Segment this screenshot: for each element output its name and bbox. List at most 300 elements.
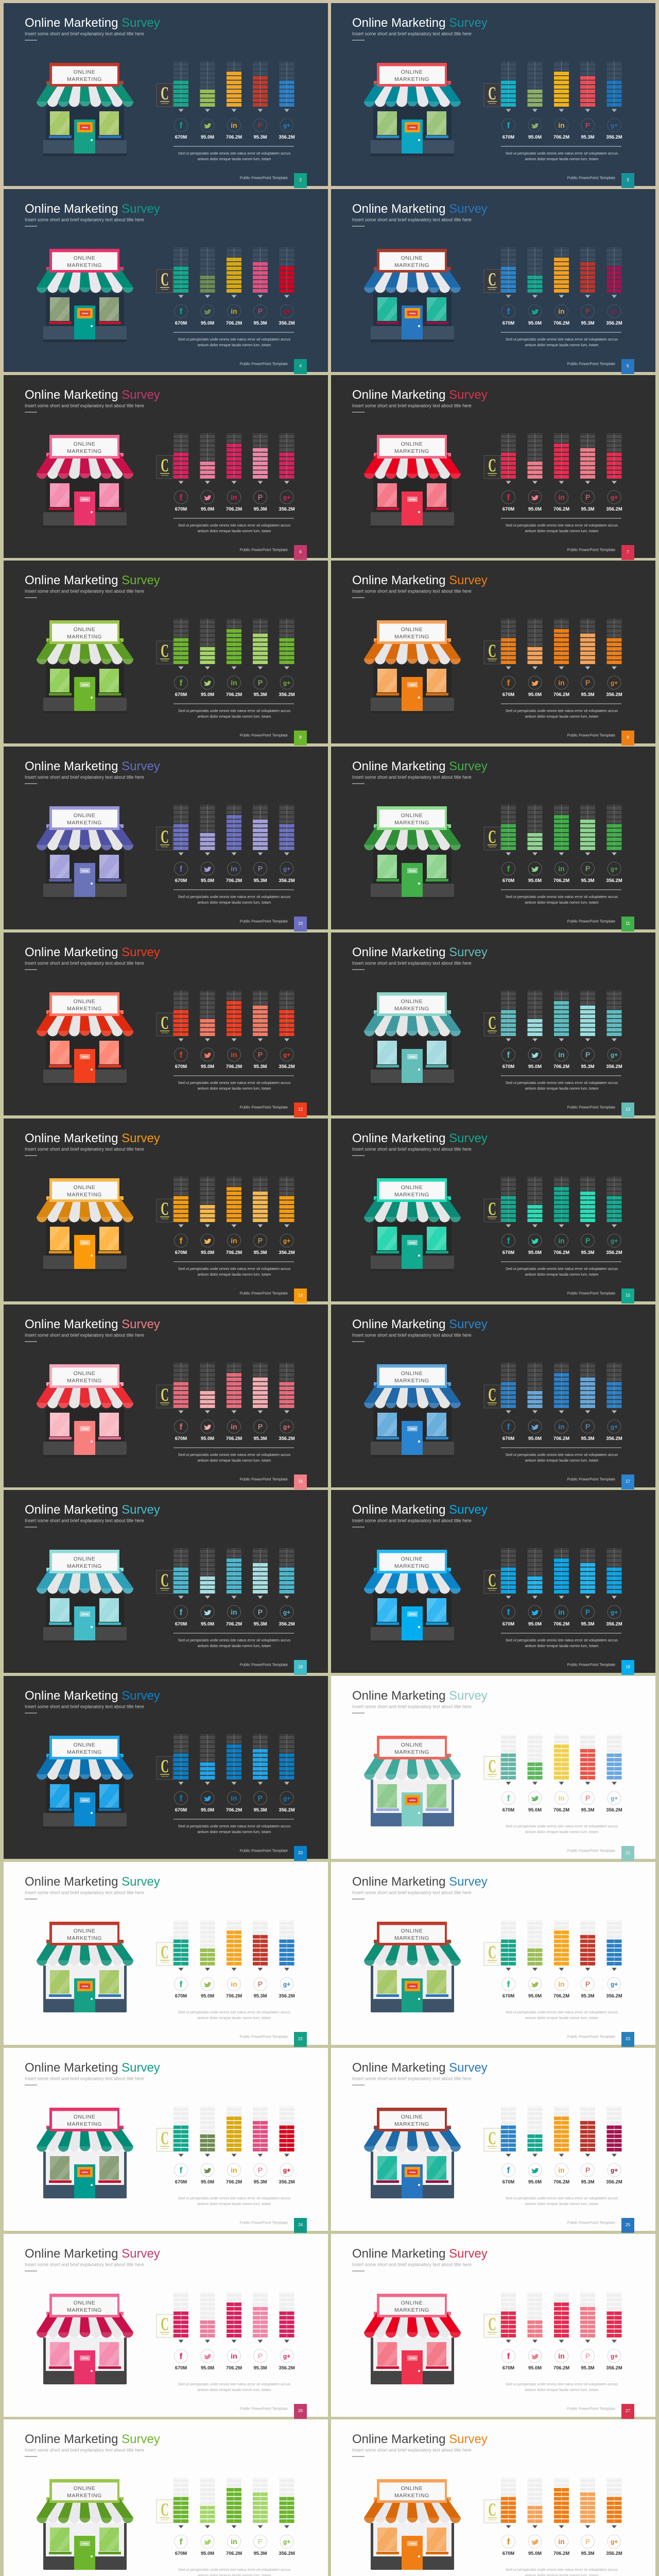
footer: Public PowerPoint Template <box>240 2406 288 2411</box>
page number: 24 <box>298 2223 303 2227</box>
description: Sed ut perspiciatis unde omnis iste natus error sit voluptatem accus <box>506 337 618 342</box>
bar chart: 95.3M <box>581 2365 595 2370</box>
bar chart: 95.3M <box>253 1063 267 1069</box>
title: Online Marketing Survey <box>352 1317 488 1331</box>
subtitle: Insert some short and brief explanatory text about title here <box>25 775 144 780</box>
subtitle: Insert some short and brief explanatory text about title here <box>352 1332 472 1337</box>
panel: slide 2 teal navy <box>4 3 328 188</box>
storefront <box>364 1178 461 1272</box>
page number: 18 <box>298 1665 303 1669</box>
description: Sed ut perspiciatis unde omnis iste natus error sit voluptatem accus <box>178 2382 290 2386</box>
page number: 19 <box>626 1665 630 1669</box>
subtitle: Insert some short and brief explanatory text about title here <box>352 588 472 594</box>
description: Sed ut perspiciatis unde omnis iste natus error sit voluptatem accus <box>178 894 290 899</box>
page number <box>621 731 634 745</box>
storefront: MARKETING <box>394 1192 429 1198</box>
description: Sed ut perspiciatis unde omnis iste natus error sit voluptatem accus <box>506 1824 618 1828</box>
description: antium dolor emque lauda nomm lum, totam <box>198 343 271 347</box>
bar chart: 670M <box>502 2550 514 2556</box>
bar chart <box>157 2292 295 2377</box>
bar chart <box>484 2106 622 2191</box>
storefront: ONLINE <box>401 255 423 261</box>
description: Sed ut perspiciatis unde omnis iste natus error sit voluptatem accus <box>506 2010 618 2014</box>
footer: Public PowerPoint Template <box>567 1662 615 1667</box>
bar chart: 95.3M <box>253 1621 267 1626</box>
bar chart: 356.2M <box>279 2179 295 2184</box>
page number: 25 <box>626 2223 630 2227</box>
bar chart: 95.0M <box>201 2550 214 2556</box>
bar chart: 95.0M <box>201 691 214 697</box>
storefront: MARKETING <box>67 76 102 82</box>
bar chart <box>484 619 622 704</box>
bar chart: 670M <box>175 2365 187 2370</box>
storefront: MARKETING <box>394 820 429 826</box>
storefront <box>37 2294 133 2387</box>
footer: Public PowerPoint Template <box>567 362 615 366</box>
bar chart: 95.0M <box>528 506 542 512</box>
bar chart: 95.3M <box>253 2365 267 2370</box>
page number: 21 <box>626 1851 630 1855</box>
description <box>178 151 290 161</box>
bar chart: 670M <box>502 1063 514 1069</box>
bar chart: 356.2M <box>279 1621 295 1626</box>
page number: 8 <box>299 735 302 740</box>
bar chart: 670M <box>175 1621 187 1626</box>
bar chart <box>484 2478 622 2563</box>
bar chart: 95.3M <box>253 1993 267 1998</box>
footer: Public PowerPoint Template <box>240 1849 288 1853</box>
storefront: MARKETING <box>67 1749 102 1755</box>
title: Online Marketing Survey <box>352 573 488 587</box>
bar chart <box>157 1548 295 1633</box>
bar chart: 95.3M <box>581 2179 595 2184</box>
footer: Public PowerPoint Template <box>240 2034 288 2039</box>
footer: Public PowerPoint Template <box>240 1662 288 1667</box>
title: Online Marketing Survey <box>25 1689 160 1703</box>
page number: 17 <box>626 1479 630 1484</box>
bar chart: 706.2M <box>226 1807 242 1812</box>
bar chart: 670M <box>175 691 187 697</box>
panel: slide 4 green navy <box>4 189 328 374</box>
storefront: ONLINE <box>74 1184 95 1191</box>
bar chart: 95.3M <box>253 2179 267 2184</box>
title: Online Marketing Survey <box>25 1503 160 1517</box>
description <box>506 1452 618 1463</box>
description: antium dolor emque lauda nomm lum, totam <box>198 1086 271 1091</box>
description <box>506 337 618 347</box>
storefront: MARKETING <box>67 820 102 826</box>
title: Online Marketing Survey <box>25 759 160 773</box>
bar chart: 356.2M <box>606 691 622 697</box>
description <box>178 523 290 533</box>
bar chart: 95.3M <box>581 2550 595 2556</box>
bar chart: 706.2M <box>226 2179 242 2184</box>
page number <box>621 173 634 188</box>
description: antium dolor emque lauda nomm lum, totam <box>525 1829 598 1834</box>
bar chart <box>484 1363 622 1448</box>
storefront: ONLINE <box>74 2300 95 2306</box>
page number <box>294 2404 307 2419</box>
storefront <box>37 1178 133 1272</box>
bar chart: 95.0M <box>528 1807 542 1812</box>
subtitle: Insert some short and brief explanatory text about title here <box>25 217 144 223</box>
footer: Public PowerPoint Template <box>567 733 615 738</box>
page number: 7 <box>627 550 629 554</box>
footer: Public PowerPoint Template <box>567 2034 615 2039</box>
description <box>178 1452 290 1463</box>
subtitle: Insert some short and brief explanatory text about title here <box>25 1518 144 1523</box>
storefront: MARKETING <box>67 448 102 454</box>
panel: slide 11 green dark <box>331 747 655 931</box>
description: Sed ut perspiciatis unde omnis iste natus error sit voluptatem accus <box>178 1452 290 1457</box>
bar chart <box>157 61 295 146</box>
footer: Public PowerPoint Template <box>567 2406 615 2411</box>
storefront <box>364 2108 461 2201</box>
title: Online Marketing Survey <box>352 1875 488 1889</box>
bar chart: 95.3M <box>581 1993 595 1998</box>
bar chart: 95.3M <box>581 134 595 140</box>
panel: slide 25 light blue <box>331 2048 655 2233</box>
storefront: ONLINE <box>401 626 423 633</box>
page number <box>294 359 307 374</box>
description: antium dolor emque lauda nomm lum, totam <box>198 2201 271 2206</box>
footer: Public PowerPoint Template <box>567 2221 615 2225</box>
bar chart: 706.2M <box>226 1249 242 1255</box>
storefront <box>37 620 133 714</box>
description: antium dolor emque lauda nomm lum, totam <box>525 2201 598 2206</box>
description: antium dolor emque lauda nomm lum, totam <box>198 714 271 719</box>
panel: slide 15 turquoise dark <box>331 1118 655 1303</box>
title: Online Marketing Survey <box>352 2247 488 2261</box>
description: Sed ut perspiciatis unde omnis iste natus error sit voluptatem accus <box>178 1266 290 1271</box>
bar chart <box>157 1920 295 2005</box>
description: Sed ut perspiciatis unde omnis iste natus error sit voluptatem accus <box>506 1638 618 1642</box>
bar chart: 95.3M <box>581 691 595 697</box>
footer: Public PowerPoint Template <box>240 2221 288 2225</box>
subtitle: Insert some short and brief explanatory text about title here <box>25 1704 144 1709</box>
page number: 26 <box>298 2409 303 2413</box>
title: Online Marketing Survey <box>25 2432 160 2446</box>
description: antium dolor emque lauda nomm lum, totam <box>525 1272 598 1277</box>
subtitle: Insert some short and brief explanatory text about title here <box>352 1147 472 1152</box>
description <box>506 2010 618 2020</box>
description <box>506 523 618 533</box>
storefront: MARKETING <box>67 1192 102 1198</box>
storefront <box>37 63 133 156</box>
footer: Public PowerPoint Template <box>240 362 288 366</box>
storefront: ONLINE <box>401 2114 423 2120</box>
description: Sed ut perspiciatis unde omnis iste natus error sit voluptatem accus <box>506 2567 618 2572</box>
page number <box>621 545 634 560</box>
bar chart: 95.0M <box>528 2179 542 2184</box>
description: antium dolor emque lauda nomm lum, totam <box>525 1086 598 1091</box>
description <box>178 337 290 347</box>
bar chart: 356.2M <box>606 506 622 512</box>
bar chart: 670M <box>502 1621 514 1626</box>
page number: 27 <box>626 2409 630 2413</box>
storefront: ONLINE <box>74 1928 95 1934</box>
bar chart <box>484 247 622 332</box>
bar chart: 95.0M <box>528 877 542 883</box>
page number <box>621 359 634 374</box>
bar chart: 356.2M <box>279 1807 295 1812</box>
storefront: MARKETING <box>67 634 102 640</box>
bar chart: 95.0M <box>528 1249 542 1255</box>
page number: 16 <box>298 1479 303 1484</box>
page number: 20 <box>298 1851 303 1855</box>
description: Sed ut perspiciatis unde omnis iste natus error sit voluptatem accus <box>178 708 290 713</box>
description: antium dolor emque lauda nomm lum, totam <box>198 900 271 905</box>
page number <box>294 1289 307 1303</box>
bar chart: 706.2M <box>553 1249 569 1255</box>
description: antium dolor emque lauda nomm lum, totam <box>198 2387 271 2392</box>
storefront <box>37 249 133 342</box>
title: Online Marketing Survey <box>25 202 160 216</box>
bar chart: 95.0M <box>201 1249 214 1255</box>
page number: 15 <box>626 1293 630 1298</box>
storefront: ONLINE <box>401 1742 423 1748</box>
bar chart: 670M <box>502 2365 514 2370</box>
description: antium dolor emque lauda nomm lum, totam <box>525 900 598 905</box>
bar chart: 95.0M <box>201 134 214 140</box>
storefront <box>364 806 461 900</box>
description: Sed ut perspiciatis unde omnis iste natus error sit voluptatem accus <box>178 523 290 528</box>
storefront <box>37 2108 133 2201</box>
bar chart: 670M <box>502 877 514 883</box>
bar chart: 706.2M <box>226 1993 242 1998</box>
title: Online Marketing Survey <box>352 202 488 216</box>
bar chart: 95.0M <box>528 1993 542 1998</box>
bar chart: 706.2M <box>553 2179 569 2184</box>
panel: slide 19 sky dark <box>331 1490 655 1675</box>
footer: Public PowerPoint Template <box>567 1477 615 1482</box>
subtitle: Insert some short and brief explanatory text about title here <box>352 403 472 408</box>
bar chart: 95.0M <box>201 877 214 883</box>
description <box>178 1824 290 1834</box>
panel: slide 17 blue dark <box>331 1304 655 1489</box>
storefront <box>37 1736 133 1829</box>
bar chart: 95.0M <box>528 1621 542 1626</box>
footer: Public PowerPoint Template <box>240 175 288 180</box>
storefront: ONLINE <box>401 998 423 1005</box>
panel: slide 16 salmon dark <box>4 1304 328 1489</box>
bar chart: 670M <box>502 320 514 326</box>
page number <box>294 545 307 560</box>
bar chart: 356.2M <box>606 2550 622 2556</box>
bar chart: 706.2M <box>553 1063 569 1069</box>
bar chart: 95.0M <box>201 506 214 512</box>
bar chart <box>157 1363 295 1448</box>
description: antium dolor emque lauda nomm lum, totam <box>198 2015 271 2020</box>
description <box>178 1266 290 1277</box>
storefront <box>37 2479 133 2572</box>
bar chart: 356.2M <box>279 1435 295 1441</box>
bar chart: 356.2M <box>279 1249 295 1255</box>
bar chart <box>484 805 622 890</box>
bar chart: 670M <box>175 1249 187 1255</box>
description <box>506 2382 618 2392</box>
description <box>506 2567 618 2576</box>
description <box>506 1824 618 1834</box>
bar chart: 706.2M <box>553 320 569 326</box>
description: antium dolor emque lauda nomm lum, totam <box>198 1458 271 1463</box>
storefront <box>37 1922 133 2015</box>
page number: 4 <box>299 364 302 368</box>
storefront: MARKETING <box>394 1563 429 1569</box>
bar chart: 670M <box>175 2179 187 2184</box>
panel: slide 12 red dark <box>4 933 328 1117</box>
title: Online Marketing Survey <box>25 2247 160 2261</box>
bar chart: 706.2M <box>226 134 242 140</box>
storefront <box>364 1550 461 1643</box>
bar chart: 670M <box>502 1435 514 1441</box>
footer: Public PowerPoint Template <box>567 919 615 923</box>
footer: Public PowerPoint Template <box>567 547 615 552</box>
description: antium dolor emque lauda nomm lum, totam <box>198 1643 271 1648</box>
description <box>506 1266 618 1277</box>
title: Online Marketing Survey <box>25 573 160 587</box>
bar chart <box>157 247 295 332</box>
subtitle: Insert some short and brief explanatory text about title here <box>25 31 144 36</box>
bar chart: 356.2M <box>606 877 622 883</box>
subtitle: Insert some short and brief explanatory text about title here <box>25 403 144 408</box>
bar chart: 95.0M <box>201 1063 214 1069</box>
bar chart: 95.0M <box>528 1435 542 1441</box>
panel: slide 8 green dark <box>4 561 328 745</box>
title: Online Marketing Survey <box>352 16 488 30</box>
storefront <box>364 249 461 342</box>
page number: 3 <box>627 178 629 182</box>
subtitle: Insert some short and brief explanatory text about title here <box>25 2447 144 2452</box>
bar chart: 95.3M <box>253 691 267 697</box>
storefront: ONLINE <box>74 2114 95 2120</box>
footer: Public PowerPoint Template <box>240 1105 288 1110</box>
description: Sed ut perspiciatis unde omnis iste natus error sit voluptatem accus <box>506 1452 618 1457</box>
bar chart: 706.2M <box>226 320 242 326</box>
panel: slide 13 mint dark <box>331 933 655 1117</box>
subtitle: Insert some short and brief explanatory text about title here <box>25 2262 144 2267</box>
description <box>506 1080 618 1091</box>
bar chart <box>157 2106 295 2191</box>
bar chart: 356.2M <box>606 1435 622 1441</box>
description: antium dolor emque lauda nomm lum, totam <box>198 157 271 161</box>
title: Online Marketing Survey <box>352 759 488 773</box>
title: Online Marketing Survey <box>352 945 488 959</box>
bar chart: 95.3M <box>581 1807 595 1812</box>
subtitle: Insert some short and brief explanatory text about title here <box>352 2447 472 2452</box>
description <box>178 1080 290 1091</box>
storefront: ONLINE <box>74 626 95 633</box>
storefront: MARKETING <box>394 1935 429 1941</box>
panel: slide 6 pink dark <box>4 375 328 560</box>
bar chart: 95.0M <box>201 1993 214 1998</box>
storefront <box>364 63 461 156</box>
description: Sed ut perspiciatis unde omnis iste natus error sit voluptatem accus <box>178 1824 290 1828</box>
subtitle: Insert some short and brief explanatory text about title here <box>352 1704 472 1709</box>
title: Online Marketing Survey <box>25 388 160 402</box>
title: Online Marketing Survey <box>25 945 160 959</box>
storefront <box>364 435 461 528</box>
footer: Public PowerPoint Template <box>240 919 288 923</box>
page number <box>621 917 634 931</box>
bar chart: 95.3M <box>581 1435 595 1441</box>
bar chart: 95.3M <box>581 1249 595 1255</box>
storefront: MARKETING <box>394 448 429 454</box>
subtitle: Insert some short and brief explanatory text about title here <box>352 31 472 36</box>
description: antium dolor emque lauda nomm lum, totam <box>525 2387 598 2392</box>
description: antium dolor emque lauda nomm lum, totam <box>525 1643 598 1648</box>
bar chart: 356.2M <box>606 320 622 326</box>
description: Sed ut perspiciatis unde omnis iste natus error sit voluptatem accus <box>178 151 290 156</box>
storefront: MARKETING <box>394 76 429 82</box>
bar chart: 95.3M <box>581 506 595 512</box>
storefront: ONLINE <box>401 69 423 75</box>
storefront: ONLINE <box>74 1742 95 1748</box>
bar chart: 706.2M <box>553 2550 569 2556</box>
page number <box>621 2404 634 2419</box>
bar chart: 706.2M <box>553 1435 569 1441</box>
page number: 6 <box>299 550 302 554</box>
storefront: MARKETING <box>394 1006 429 1012</box>
storefront: ONLINE <box>74 1556 95 1562</box>
subtitle: Insert some short and brief explanatory text about title here <box>352 1890 472 1895</box>
storefront: MARKETING <box>394 1378 429 1384</box>
title: Online Marketing Survey <box>352 2061 488 2075</box>
bar chart: 670M <box>502 134 514 140</box>
title: Online Marketing Survey <box>352 2432 488 2446</box>
panel: slide 24 light green <box>4 2048 328 2233</box>
bar chart: 95.3M <box>253 1249 267 1255</box>
description: Sed ut perspiciatis unde omnis iste natus error sit voluptatem accus <box>178 2196 290 2200</box>
storefront <box>364 2294 461 2387</box>
bar chart <box>157 805 295 890</box>
storefront <box>37 435 133 528</box>
bar chart: 95.0M <box>528 691 542 697</box>
bar chart: 356.2M <box>279 1993 295 1998</box>
bar chart: 95.0M <box>201 1435 214 1441</box>
subtitle: Insert some short and brief explanatory text about title here <box>352 775 472 780</box>
storefront: ONLINE <box>401 441 423 447</box>
page number <box>294 1475 307 1489</box>
footer: Public PowerPoint Template <box>240 1477 288 1482</box>
storefront <box>364 992 461 1086</box>
panel: slide 3 cyan navy <box>331 3 655 188</box>
description: Sed ut perspiciatis unde omnis iste natus error sit voluptatem accus <box>178 337 290 342</box>
description <box>178 2010 290 2020</box>
bar chart: 356.2M <box>606 1993 622 1998</box>
description: antium dolor emque lauda nomm lum, totam <box>198 1272 271 1277</box>
page number <box>294 731 307 745</box>
description: antium dolor emque lauda nomm lum, totam <box>525 157 598 161</box>
description <box>178 708 290 719</box>
bar chart: 356.2M <box>279 2365 295 2370</box>
title: Online Marketing Survey <box>25 1317 160 1331</box>
bar chart: 95.3M <box>253 320 267 326</box>
description: antium dolor emque lauda nomm lum, totam <box>525 2015 598 2020</box>
storefront: MARKETING <box>394 2493 429 2499</box>
description: Sed ut perspiciatis unde omnis iste natus error sit voluptatem accus <box>506 708 618 713</box>
title: Online Marketing Survey <box>25 1875 160 1889</box>
panel: slide 27 light red <box>331 2234 655 2419</box>
page number <box>294 1846 307 1861</box>
description <box>178 2196 290 2206</box>
bar chart: 706.2M <box>553 1807 569 1812</box>
panel: slide 10 purple dark <box>4 747 328 931</box>
bar chart: 706.2M <box>226 1063 242 1069</box>
panel: slide 14 amber dark <box>4 1118 328 1303</box>
bar chart: 356.2M <box>279 320 295 326</box>
bar chart: 706.2M <box>226 2550 242 2556</box>
